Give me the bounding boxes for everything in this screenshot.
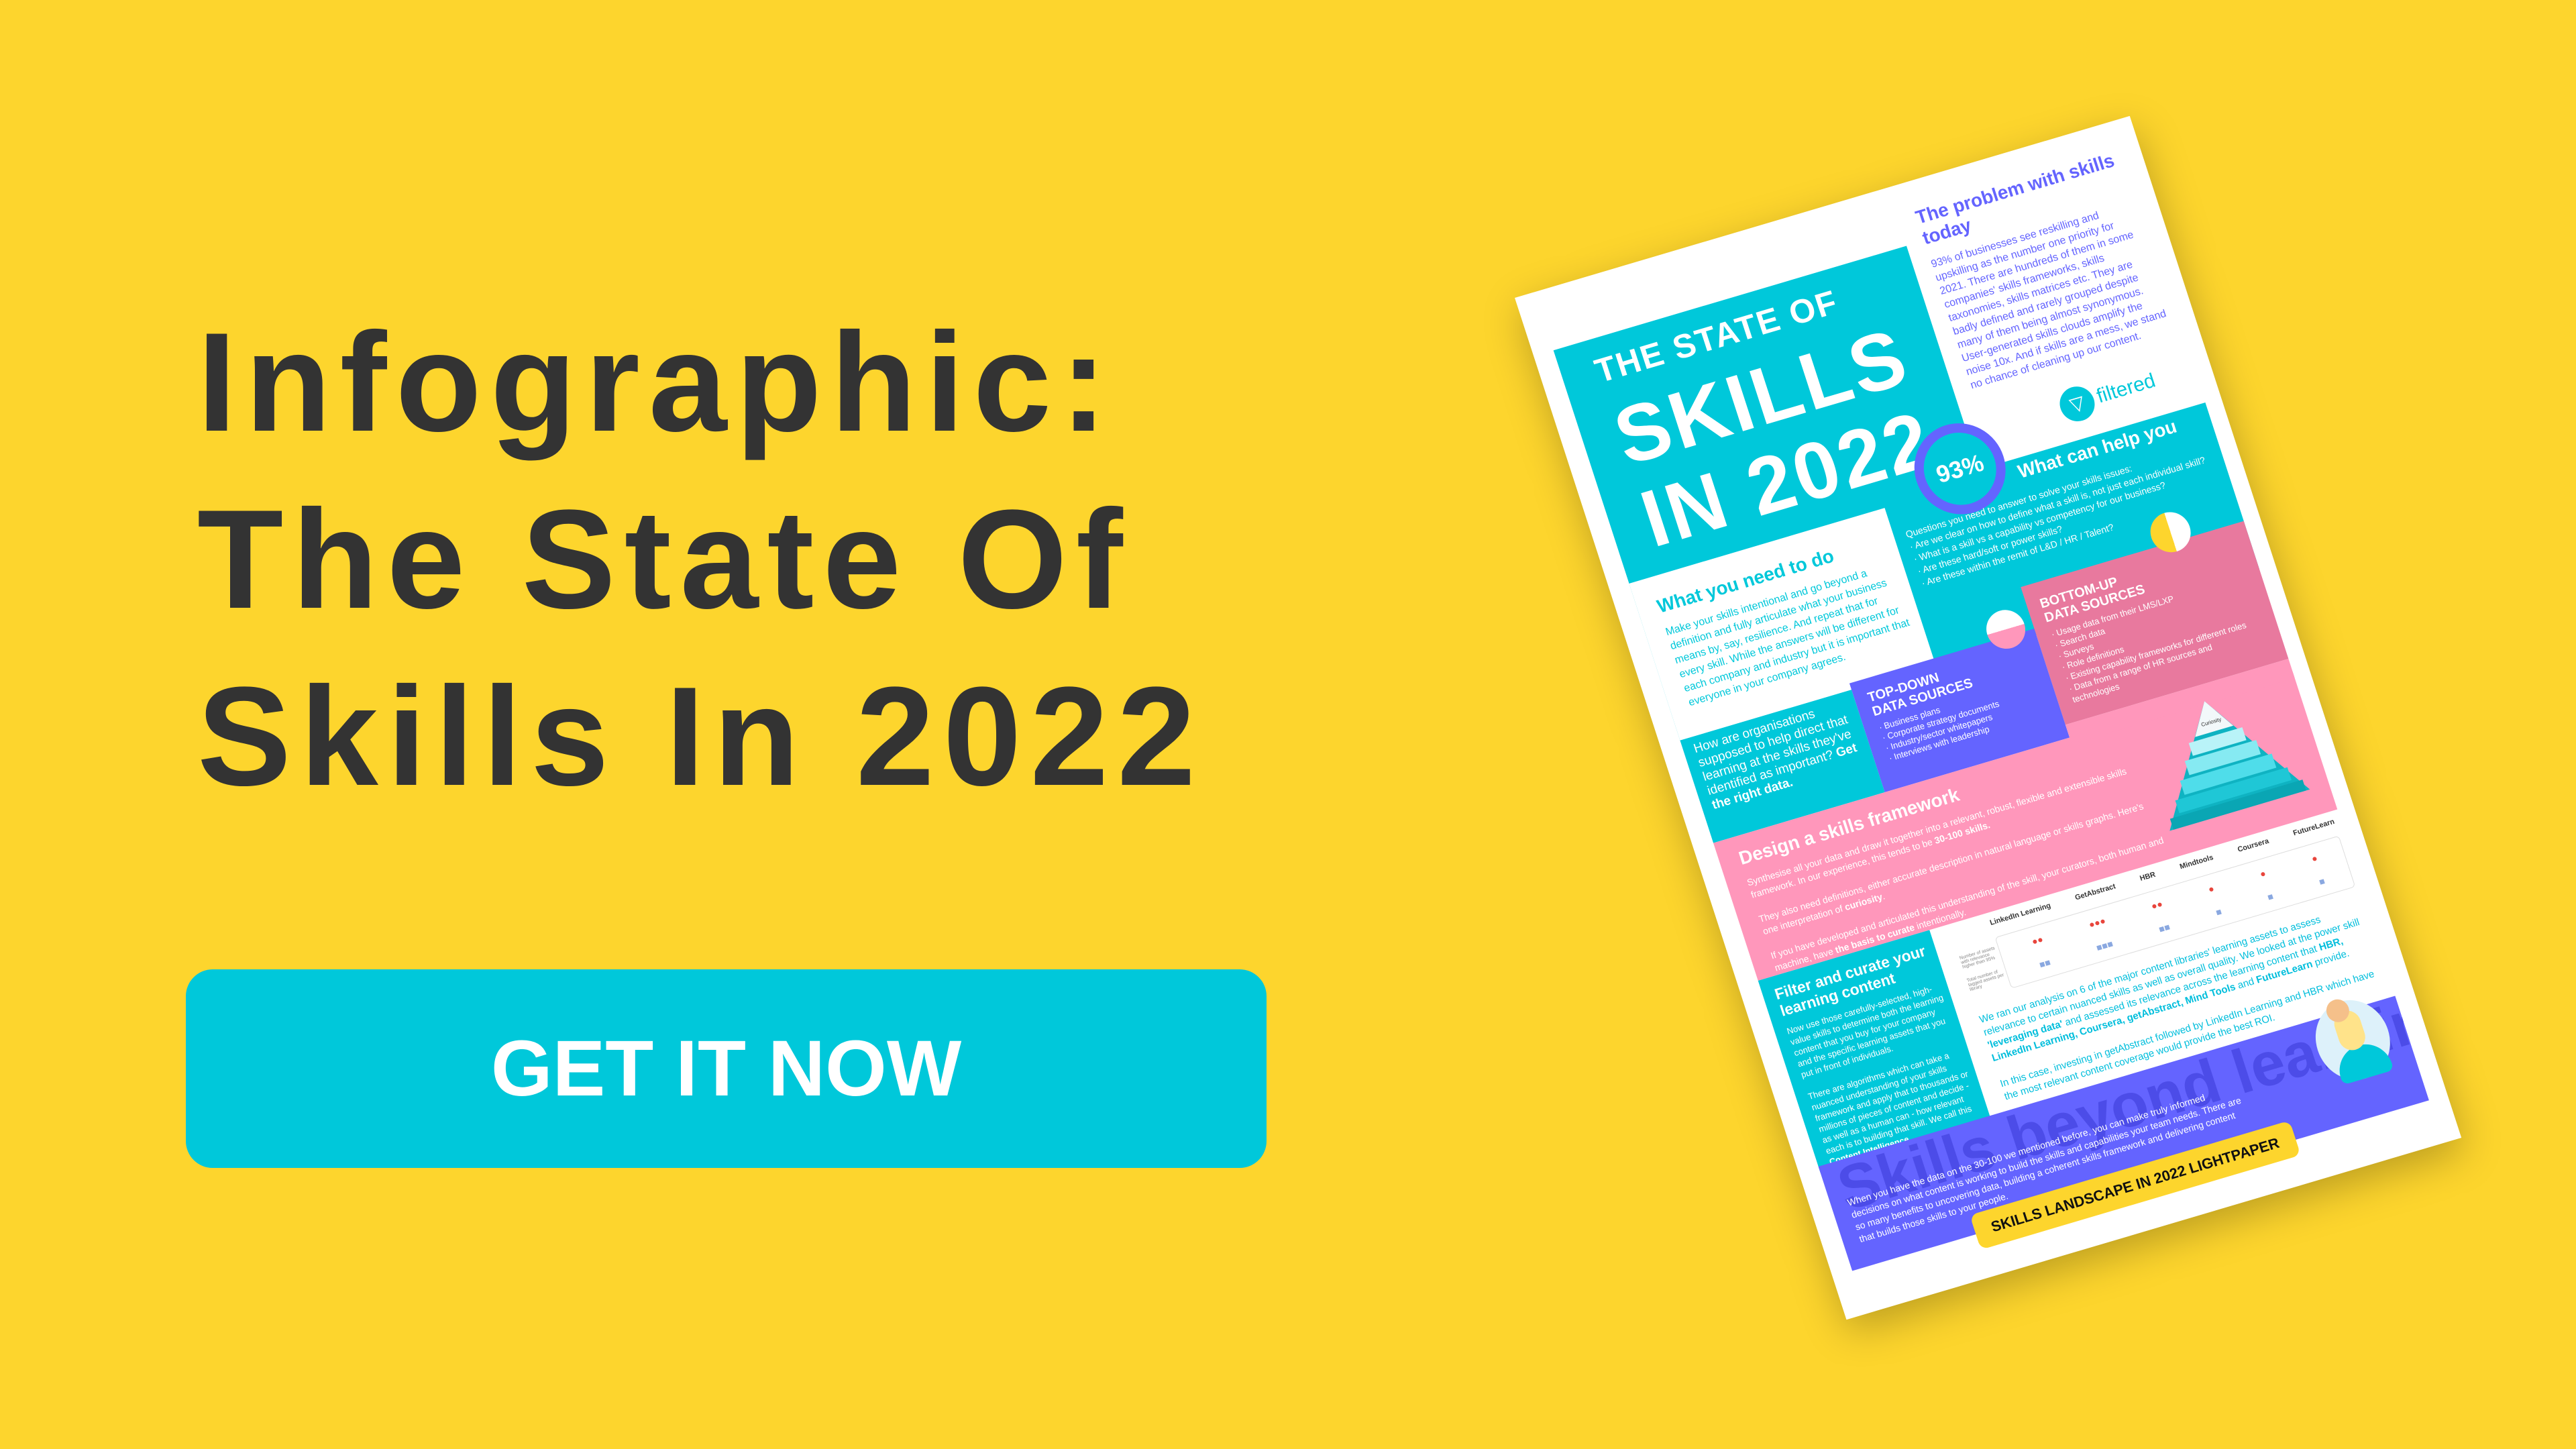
panel: problem with skills: 93% of businesses see reskilling and upskilling as the number one priority for 2021. There are hundreds of them in some companies' skills frameworks, skills taxonomies, skills matrices etc. They are badly defined and rarely grouped despite many of them being almost synonymous. User-generated skills clouds amplify the noise 10x. And if skills are a mess, we stand no chance of cleaning up our content. [1930,210,2167,391]
button: get it now [186,969,1267,1168]
panel: design a skills framework: Design a skills framework [1736,784,1962,869]
callout: lightpaper pill: SKILLS LANDSCAPE IN 2022 LIGHTPAPER [1989,1134,2282,1235]
chart: provider comparison table: Total number of tagged assets per library [1966,970,2004,992]
panel: top-down data sources: TOP-DOWN [1866,670,1941,705]
headline [197,303,1204,815]
panel: top-down data sources: DATA SOURCES [1870,676,1975,719]
chart: provider comparison table: HBR [2139,871,2157,883]
title block: THE STATE OF [1591,283,1843,390]
chart: provider comparison table: LinkedIn Learning [1989,902,2052,927]
title block: IN 2022 [1631,394,1944,564]
chart: provider comparison table: ●●● [2088,915,2107,930]
icon: pyramid badge [2145,507,2196,557]
panel: bottom-up data sources: BOTTOM-UP [2038,575,2120,611]
panel: filter and curate: Now use those carefully-selected, high-value skills to determine both the learning content that you buy for your company and the specific learning assets that you put in front of individuals. [1786,984,1947,1080]
panel: bottom-up data sources: Search data [2059,626,2106,649]
title block [1591,283,1944,564]
infographic document preview [1515,116,2461,1320]
icon: 93% ring: 93% [1933,449,1987,488]
icon: pink badge [1982,605,2031,653]
icon: illustration figure [2316,1000,2392,1083]
chart: provider comparison table: ■■ [2157,921,2171,934]
chart: provider comparison table: ● [2259,867,2267,879]
panel: what can help you: · Are we clear on how to define what a skill is, not just each individual skill? [1909,454,2206,552]
panel: top-down data sources: Business plans [1882,705,1941,731]
chart: provider comparison table: ■■ [2038,957,2052,970]
panel: top-down data sources: Corporate strategy documents [1886,698,2000,741]
chart: provider comparison table: ●● [2031,934,2045,947]
button: get it now: GET IT NOW [491,1024,961,1113]
callout: lightpaper pill [1970,1120,2301,1250]
text: analysis findings: In this case, investing in getAbstract followed by LinkedIn Learning and HBR which have the most relevant content coverage would provide the best ROI. [1998,968,2376,1102]
panel: top-down data sources: Interviews with leadership [1892,724,1990,761]
headline: Skills In 2022 [197,657,1204,815]
panel: how are organisations: How are organisations supposed to help direct that learning at the skills they've identified as important? Get the right data. [1692,707,1859,812]
chart: provider comparison table [1959,818,2355,992]
panel: bottom-up data sources [2021,521,2288,724]
icon: filtered logo [2059,370,2158,421]
chart: provider comparison table: Coursera [2237,837,2270,854]
text: analysis findings: We ran our analysis on 6 of the major content libraries' learning assets to assess relevance to certain nuanced skills as well as overall quality. We looked at the power skill 'leveraging data' and assessed its relevance across the learning content that HBR, LinkedIn Learning, Coursera, getAbstract, Mind Tools and FutureLearn provide. [1978,914,2361,1064]
panel: what you need to do [1629,508,1935,741]
panel: top-down data sources: Industry/sector whitepapers [1889,712,1994,751]
panel: top-down data sources [1849,629,2070,792]
panel: filter and curate [1758,930,1992,1173]
panel: how are organisations [1680,690,1885,843]
icon: 93% ring [1902,413,2017,525]
chart: curiosity pyramid [2169,701,2310,830]
headline: The State Of [197,480,1132,638]
panel: filter and curate: There are algorithms which can take a nuanced understanding of your skills framework and apply that to thousands or millions of pieces of content and decide - as well as a human can - how relevant each is to building that skill. We call this Content Intelligence. [1807,1051,1973,1167]
chart: curiosity pyramid: Curiosity [2200,716,2222,728]
panel: problem with skills: The problem with skills today [1913,150,2117,248]
panel: what can help you: · Are these hard/soft or power skills? [1916,523,2063,576]
chart: provider comparison table: FutureLearn [2292,818,2336,837]
panel: bottom-up data sources: Existing capability frameworks for different roles [2069,620,2247,682]
panel: skills beyond learning: When you have the data on the 30-100 we mentioned before, you can make truly informed decisions on what content is working to build the skills and capabilities your team needs. There are so many benefits to uncovering data, building a coherent skills framework and delivering content that builds those skills to your people. [1846,1092,2243,1244]
chart: provider comparison table: ● [2207,883,2216,895]
panel: design a skills framework: Synthesise all your data and draw it together into a relevant, robust, flexible and extensible skills framework. In our experience, this tends to be 30-100 skills. [1746,765,2128,900]
chart: provider comparison table: Mindtools [2179,853,2214,871]
headline: Infographic: [197,303,1116,461]
panel: what can help you: Questions you need to answer to solve your skills issues: [1904,463,2133,540]
panel: what can help you [1904,416,2206,588]
panel: what can help you: · Are these within the remit of L&D / HR / Talent? [1920,521,2115,588]
icon: filtered logo: filtered [2094,370,2158,407]
panel: filter and curate: Filter and curate your learning content [1772,942,1928,1020]
panel: bottom-up data sources: Data from a range of HR sources and technologies [2071,642,2214,704]
panel: what you need to do: What you need to do [1654,545,1836,617]
chart: provider comparison table: Number of assets with relevance higher than 95% [1959,946,1996,970]
chart: provider comparison table: ●● [2150,898,2164,912]
title block: SKILLS [1604,311,1919,482]
panel: what can help you: · What is a skill vs a capability vs competency for our business? [1912,480,2167,564]
panel: bottom-up data sources: Usage data from their LMS/LXP [2055,594,2175,638]
panel: what you need to do: Make your skills intentional and go beyond a definition and fully articulate what your business means by, say, resilience. And repeat that for every skill. While the answers will be different for each company and industry but it is important that everyone in your company agrees. [1664,568,1911,708]
panel: design a skills framework: If you have developed and articulated this understanding of the skill, your curators, both human and machine, have the basis to curate intentionally. [1769,835,2165,973]
chart: provider comparison table: GetAbstract [2074,882,2116,902]
chart: provider comparison table: ■■■ [2095,938,2114,953]
panel: what can help you: What can help you [2015,416,2180,482]
panel: bottom-up data sources: Role definitions [2065,644,2125,670]
chart: provider comparison table: ■ [2214,906,2223,918]
chart: provider comparison table: ● [2310,853,2319,864]
panel: design a skills framework [1713,672,2337,981]
icon: filtered logo: ▽ [2067,392,2087,415]
panel: bottom-up data sources: Surveys [2062,641,2095,659]
panel: bottom-up data sources: DATA SOURCES [2043,582,2147,625]
panel: design a skills framework: They also need definitions, either accurate description in natural language or skills graphs. Here's one interpretation of curiosity. [1758,800,2145,936]
chart: provider comparison table: ■ [2318,875,2326,888]
chart: provider comparison table: ■ [2266,891,2275,902]
